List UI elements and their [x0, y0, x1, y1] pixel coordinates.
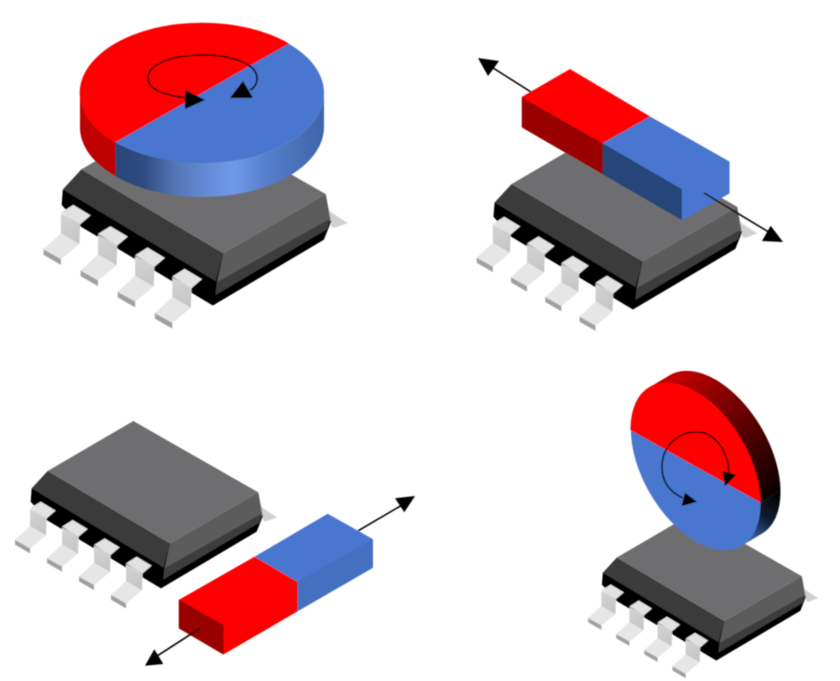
chip package	[477, 130, 757, 331]
bar magnet	[179, 514, 373, 654]
arrow: upper right	[358, 496, 415, 531]
upright diametric disc magnet	[630, 370, 782, 551]
chip package	[43, 111, 348, 329]
panel: bar magnet above chip, axial motion	[477, 58, 783, 331]
arrow: upper left	[478, 58, 531, 92]
chip package	[588, 514, 818, 678]
panel: rotating disc on top of chip	[43, 23, 348, 329]
arrow: lower right	[704, 193, 783, 242]
rotation arrow	[662, 432, 736, 506]
rotation arrow	[148, 55, 257, 109]
panel: upright disc above chip	[588, 360, 818, 678]
diametric disc magnet	[80, 23, 324, 197]
chip package	[15, 421, 277, 608]
arrow: lower left	[145, 628, 200, 666]
panel: chip with bar magnet beside it	[15, 421, 415, 666]
bar magnet	[522, 69, 729, 220]
